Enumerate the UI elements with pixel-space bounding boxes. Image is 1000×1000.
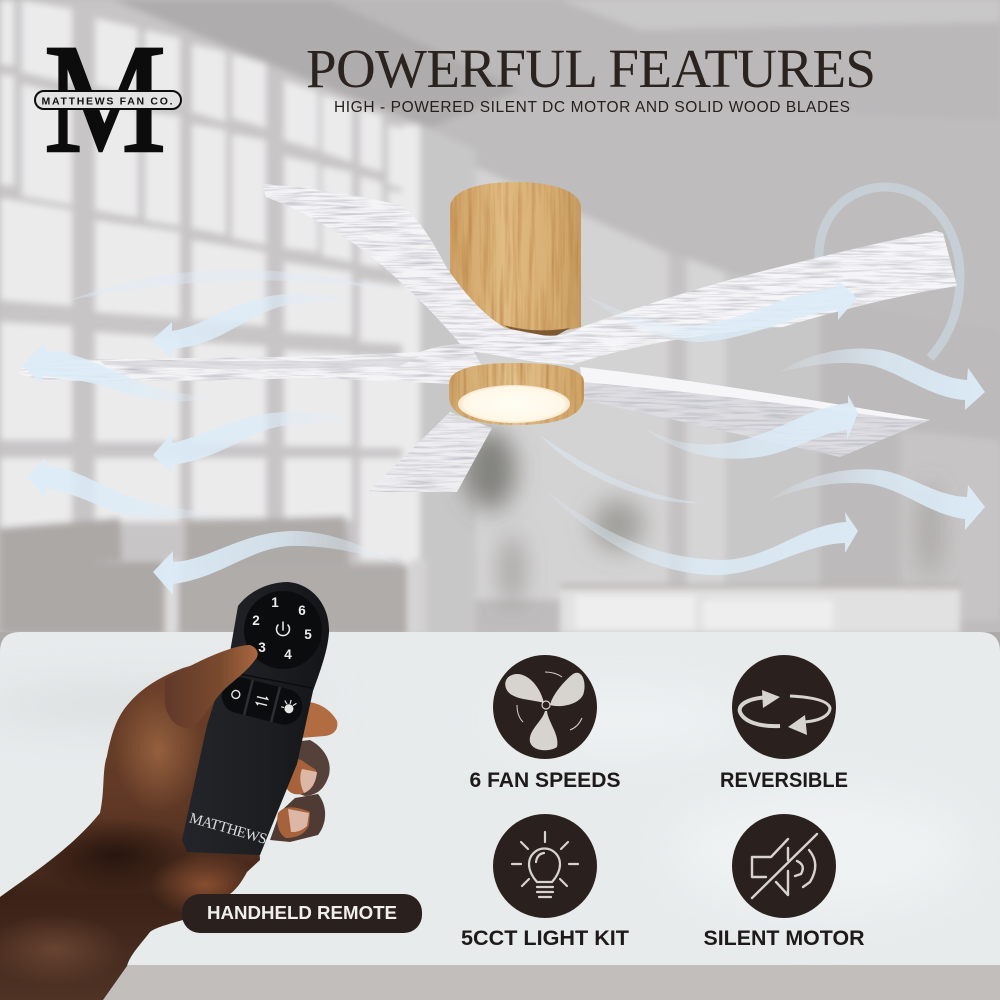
remote brand text: MATTHEWS — [187, 810, 269, 848]
canopy wood housing — [450, 182, 581, 332]
subtitle: HIGH - POWERED SILENT DC MOTOR AND SOLID WOOD BLADES — [334, 99, 850, 116]
ceiling fan — [16, 182, 957, 492]
remote buttons — [218, 674, 306, 728]
light ring — [449, 363, 584, 425]
left faint stream — [70, 270, 390, 300]
logo badge — [35, 91, 181, 109]
label: SILENT MOTOR — [704, 927, 864, 950]
swirl air stream — [819, 187, 960, 358]
icon: muted speaker — [732, 814, 836, 918]
logo badge: MATTHEWS FAN CO. — [42, 96, 173, 108]
right arrow row 2 — [780, 348, 985, 410]
hand palm and wrist — [0, 656, 260, 1000]
blade right upper — [536, 231, 957, 365]
icon: rotation arrows — [732, 655, 836, 759]
logo monogram M: M — [44, 12, 166, 185]
remote body: 5 — [304, 627, 312, 642]
back fingers — [270, 702, 337, 842]
canopy shadow — [503, 325, 570, 345]
left arrow row 5 — [153, 531, 400, 595]
power symbol — [276, 622, 290, 636]
air flow arrows — [22, 278, 985, 595]
left arrow row 4 — [27, 458, 215, 519]
hand holding remote — [0, 582, 337, 1000]
left arrow row 3 — [153, 412, 350, 473]
label: handheld remote — [182, 894, 422, 933]
label: 6 FAN SPEEDS — [470, 769, 620, 792]
right arrow row 1 — [585, 278, 857, 342]
remote body: 3 — [258, 640, 266, 655]
thumb — [165, 645, 258, 728]
right arrow row 5 — [545, 490, 858, 575]
feature: 6 fan speeds — [470, 655, 620, 792]
blade far left underside — [100, 356, 420, 369]
panel: frosted features panel — [0, 632, 1000, 965]
blade front left — [368, 412, 492, 492]
remote seam — [240, 674, 312, 688]
right arrow row 3 — [640, 395, 858, 459]
back air streams — [70, 270, 700, 503]
left arrow row 2 — [22, 342, 215, 401]
label: REVERSIBLE — [720, 769, 848, 792]
remote body — [182, 582, 329, 855]
blade right lower — [584, 372, 930, 457]
remote body: 1 — [271, 595, 279, 610]
icon: fan — [493, 655, 597, 759]
dial — [244, 591, 322, 669]
left arrow row 1 — [152, 294, 352, 358]
blade far left — [16, 344, 490, 384]
right arrow row 4 — [770, 469, 985, 530]
title: POWERFUL FEATURES — [306, 38, 876, 99]
blade right lower edge — [580, 367, 930, 420]
feature: 5cct light kit — [461, 814, 629, 950]
feature: silent motor — [704, 814, 864, 950]
right faint stream — [540, 435, 700, 503]
feature: reversible — [720, 655, 848, 792]
blade back left — [262, 184, 536, 362]
remote body: 4 — [284, 647, 292, 662]
label: handheld remote: HANDHELD REMOTE — [207, 902, 397, 923]
remote body: 6 — [298, 603, 306, 618]
icon: light bulb — [493, 814, 597, 918]
logo — [35, 12, 181, 185]
label: 5CCT LIGHT KIT — [461, 927, 629, 950]
remote body: 2 — [252, 613, 260, 628]
